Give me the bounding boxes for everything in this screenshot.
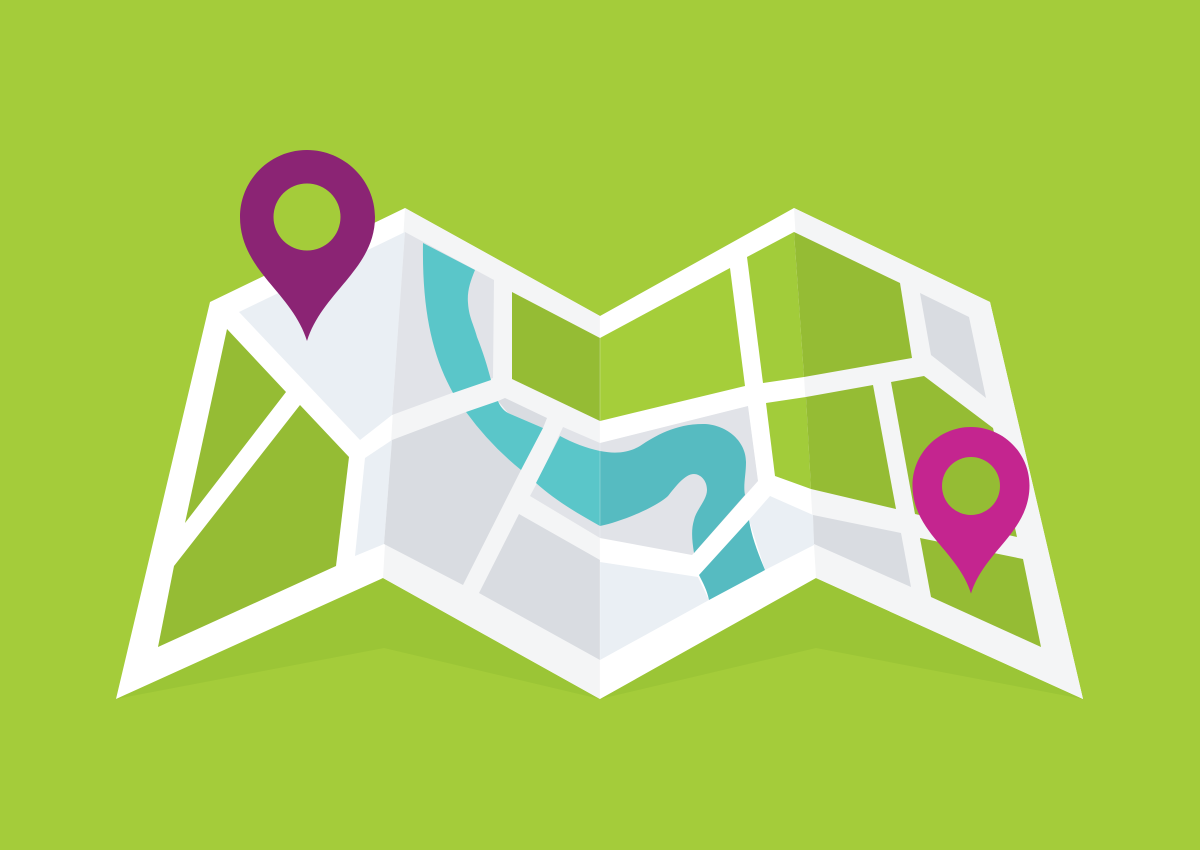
grey block: river bend bbox=[600, 406, 758, 555]
green block: middle bbox=[806, 385, 896, 509]
green block: right bbox=[891, 376, 1017, 537]
light block: top bbox=[239, 232, 405, 440]
light block: right bbox=[749, 496, 814, 570]
map drop shadow bbox=[116, 578, 1083, 699]
map sheet bbox=[116, 208, 1083, 699]
green block: triangle bbox=[185, 329, 286, 523]
grey block: top right bbox=[920, 293, 986, 398]
river: central section bbox=[536, 436, 600, 526]
light block: bottom bbox=[600, 562, 709, 660]
green block: lower right bbox=[766, 397, 811, 489]
river: top section bbox=[423, 243, 491, 393]
river: middle section bbox=[466, 401, 543, 470]
river: bend bbox=[600, 424, 746, 553]
green block: top bbox=[794, 232, 912, 377]
green block: lower left bbox=[158, 405, 349, 647]
map frame: white base bbox=[116, 208, 1083, 699]
green block: centre left bbox=[512, 292, 600, 421]
green block: centre bbox=[600, 268, 745, 421]
map frame: shaded second fold bbox=[383, 208, 600, 699]
grey block: left middle bbox=[384, 412, 521, 585]
panel: fourth fold blocks bbox=[794, 232, 1041, 647]
map frame: shaded fourth fold bbox=[794, 208, 1083, 699]
light block: lower strip bbox=[355, 440, 392, 556]
panel: third fold blocks bbox=[600, 232, 814, 660]
green block: lower right bbox=[920, 538, 1041, 647]
grey strip beneath road bbox=[498, 398, 547, 428]
river: lower section bbox=[699, 520, 765, 600]
grey block: bottom bbox=[479, 514, 600, 660]
icon: purple location pin bbox=[240, 150, 375, 341]
icon: magenta location pin bbox=[912, 427, 1030, 594]
grey block: lower middle bbox=[813, 515, 911, 587]
grey block: behind river bend bbox=[530, 427, 600, 538]
green block: upper right bbox=[747, 232, 804, 383]
grey block: top with river bbox=[392, 232, 494, 415]
panel: second fold blocks bbox=[384, 232, 600, 660]
panel: first fold blocks bbox=[158, 232, 405, 647]
